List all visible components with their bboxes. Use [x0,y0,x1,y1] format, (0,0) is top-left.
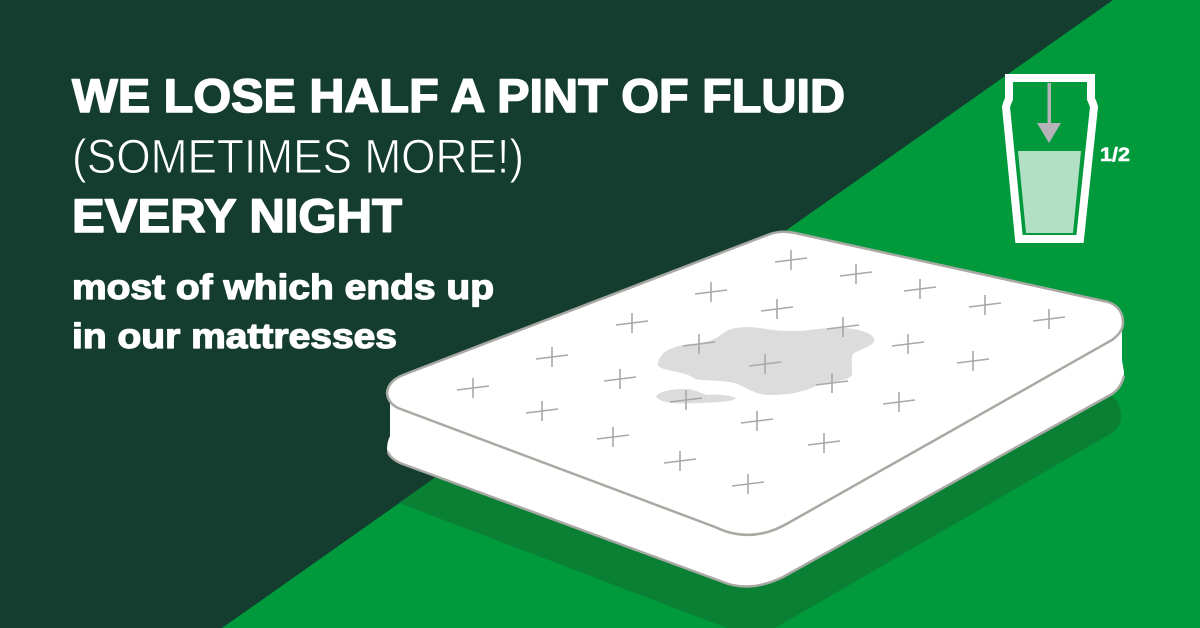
headline line 3: EVERY NIGHT [72,189,402,242]
headline line 2: (SOMETIMES MORE!) [72,131,524,184]
fraction label: 1/2 [1100,145,1130,166]
arrow down [1037,83,1061,143]
subheading line 1: most of which ends up [72,268,494,307]
glass liquid [1018,151,1081,233]
mattress top surface [387,232,1123,535]
mattress side [387,300,1124,586]
subheading [72,268,494,356]
headline [72,69,845,242]
headline line 1: WE LOSE HALF A PINT OF FLUID [72,69,845,122]
stain: small [656,389,736,403]
mattress bottom edge [388,376,1124,586]
icon: half-full pint glass [1006,78,1130,239]
mattress [387,232,1124,586]
mattress shadow [399,290,1121,628]
glass outline [1006,78,1094,239]
stain: large [658,327,874,395]
subheading line 2: in our mattresses [72,317,397,356]
quilting stitches [457,250,1065,494]
